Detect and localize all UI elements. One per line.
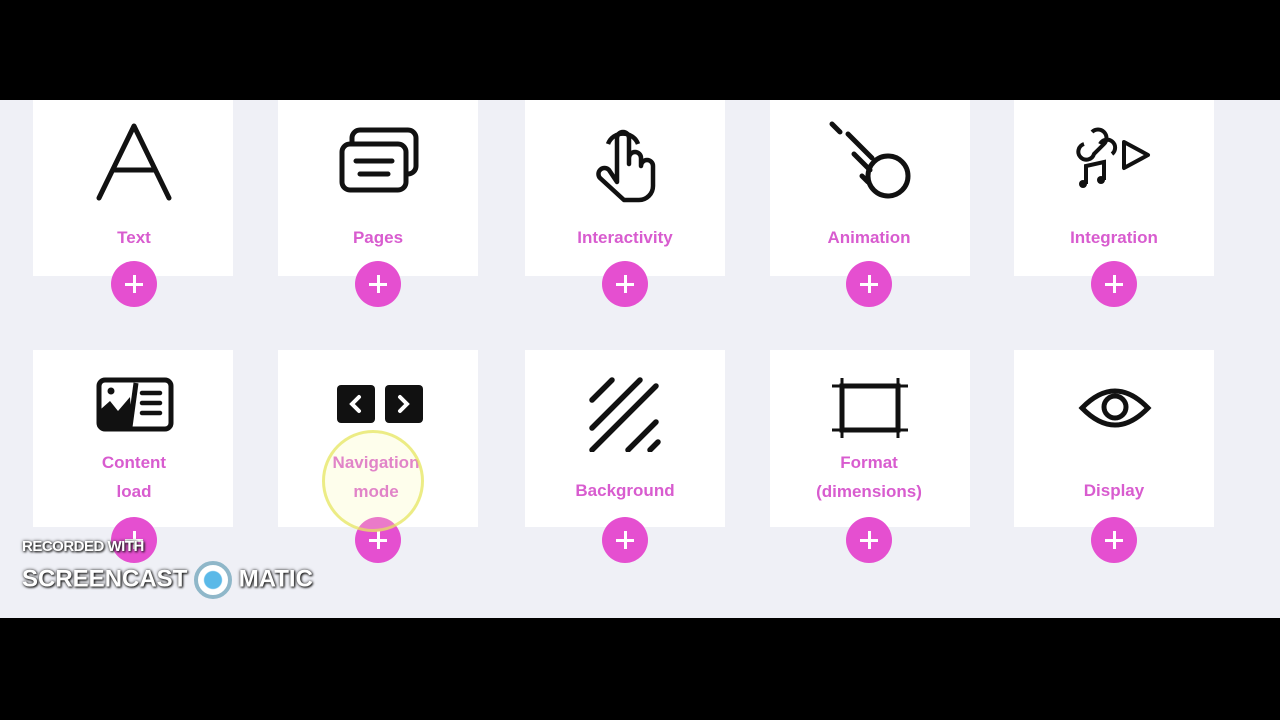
watermark	[20, 538, 315, 599]
card: Format	[770, 350, 970, 527]
label: Navigation mode: mode	[353, 482, 399, 501]
icon: integration	[1076, 128, 1150, 188]
icon: pointing hand	[596, 130, 656, 202]
label: Integration: Integration	[1070, 228, 1158, 247]
label: Animation: Animation	[827, 228, 911, 247]
icon: animation comet	[830, 122, 910, 198]
card: Content load	[33, 350, 233, 527]
label: Display: Display	[1084, 481, 1144, 500]
icon: eye	[1078, 388, 1152, 428]
label: Background: Background	[575, 481, 675, 500]
label: Text: Text	[117, 228, 151, 247]
card: Interactivity	[525, 100, 725, 276]
label: Format: Format	[840, 453, 898, 472]
label: Interactivity: Interactivity	[577, 228, 673, 247]
plus buttons row 2	[111, 517, 1137, 563]
label: Content load: Content	[102, 453, 166, 472]
icon: navigation arrows	[337, 385, 423, 423]
card: Text	[33, 100, 233, 276]
icon: content load	[96, 378, 174, 432]
icon: format frame	[832, 378, 908, 438]
label: Navigation mode	[333, 453, 419, 501]
label: Pages: Pages	[353, 228, 403, 247]
card: Background	[525, 350, 725, 527]
cursor highlight	[322, 430, 424, 532]
card: Pages	[278, 100, 478, 276]
icon: background stripes	[589, 377, 661, 452]
label: Content load: load	[117, 482, 151, 501]
card: Animation	[770, 100, 970, 276]
label: Navigation mode: Navigation	[333, 453, 419, 472]
watermark: RECORDED WITH	[22, 538, 144, 555]
label: Format: (dimensions)	[816, 482, 922, 501]
icon: pages	[340, 128, 418, 192]
card: Integration	[1014, 100, 1214, 276]
watermark: SCREENCAST MATIC	[22, 565, 313, 592]
plus buttons row 1	[111, 261, 1137, 307]
icon: letter A	[96, 124, 172, 200]
card: Navigation mode	[278, 350, 478, 527]
card: Display	[1014, 350, 1214, 527]
label: Format	[816, 453, 922, 501]
stage background	[0, 100, 1280, 618]
label: Content load	[102, 453, 166, 501]
